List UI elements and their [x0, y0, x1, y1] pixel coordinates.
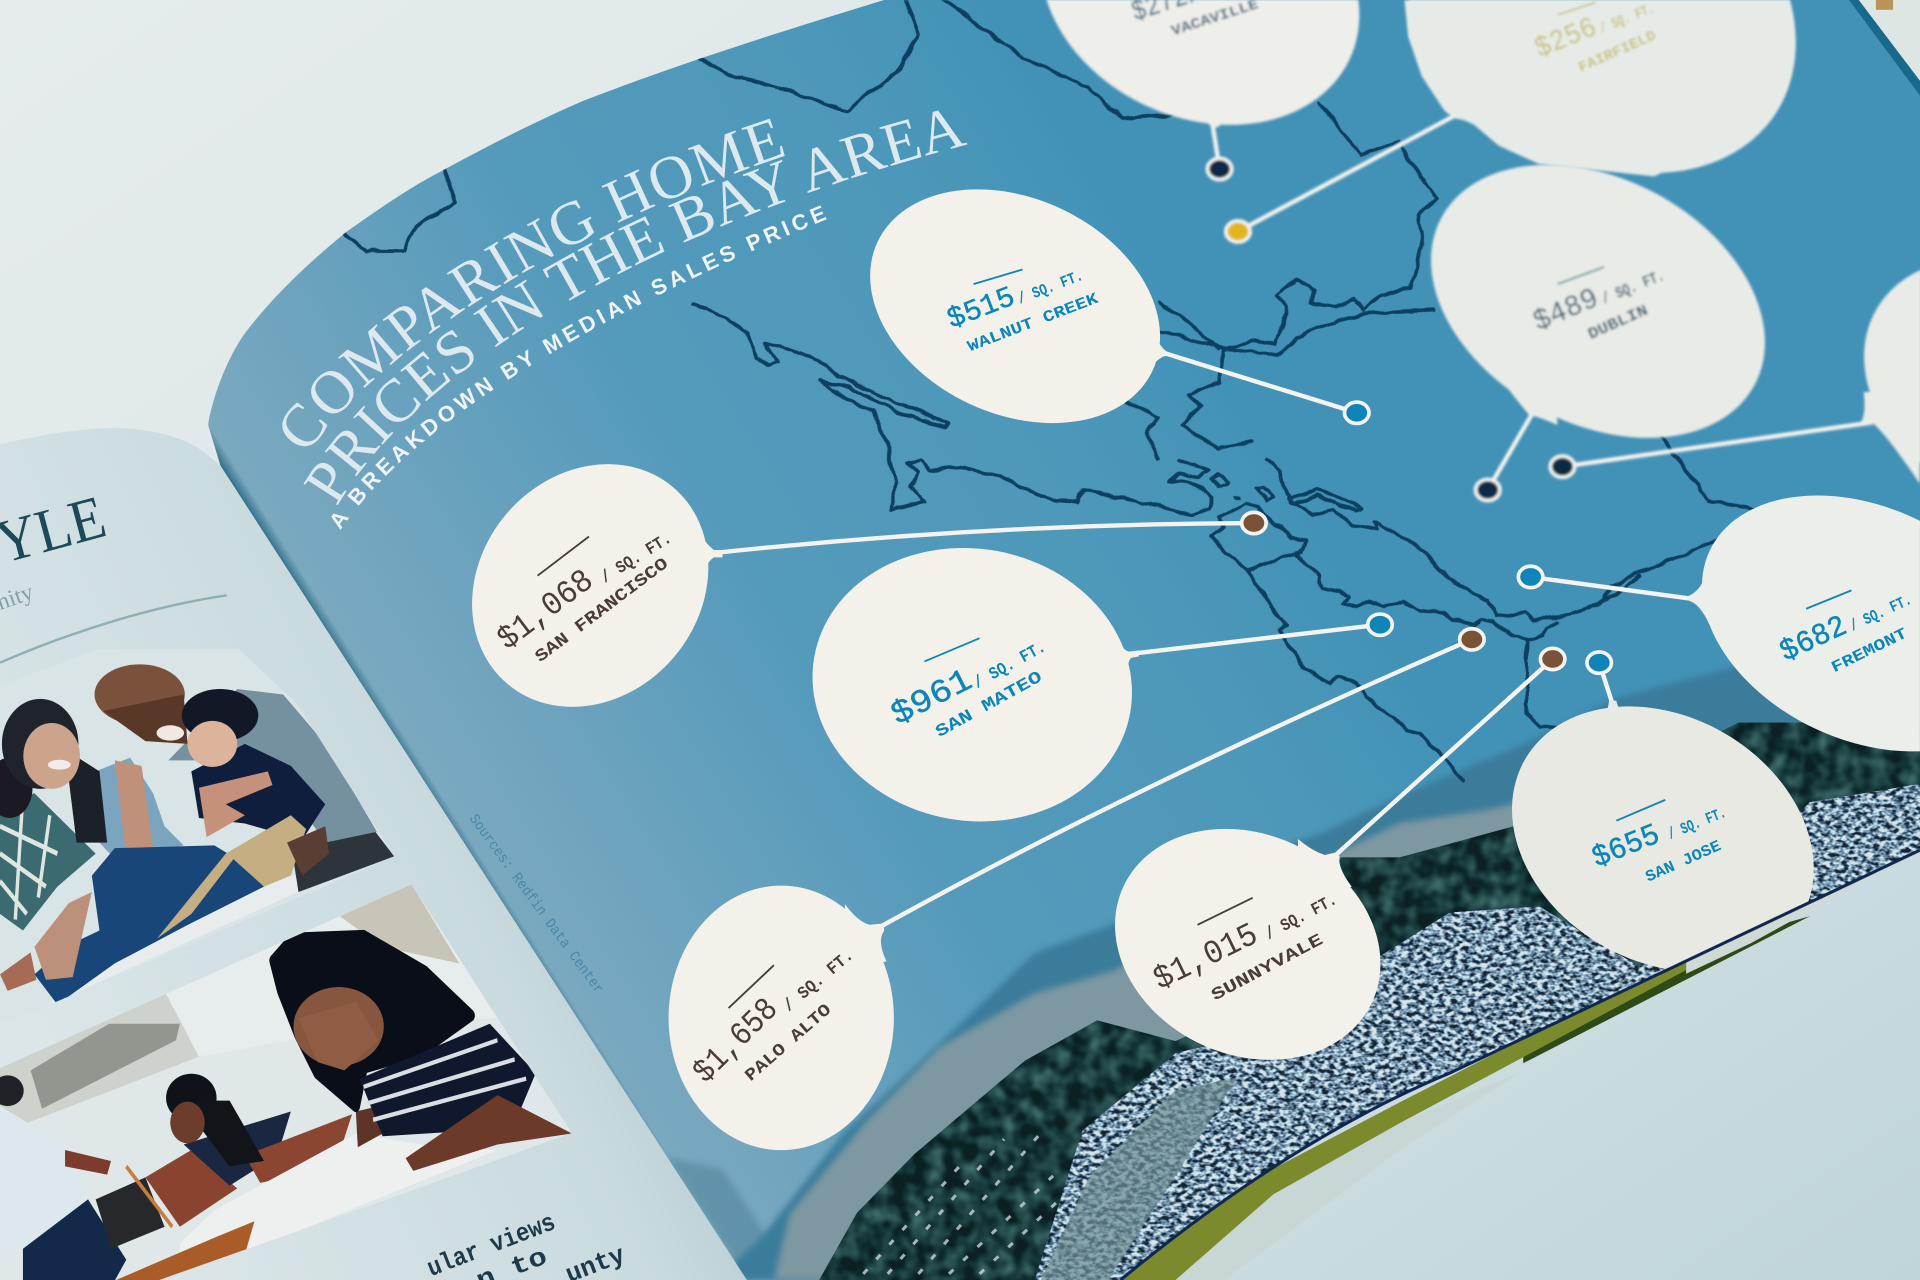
- callout: Fairfield: FAIRFIELD: [1576, 28, 1659, 77]
- callout: Sunnyvale: / SQ. FT.: [1262, 891, 1341, 945]
- callout: San Mateo: $961: [885, 661, 978, 734]
- under-page stack: [1102, 850, 1920, 1280]
- callout: Walnut Creek: [832, 144, 1369, 468]
- callout: San Mateo: [812, 548, 1394, 822]
- callout: Fremont: FREMONT: [1829, 625, 1911, 677]
- callout: Walnut Creek: $515: [943, 281, 1020, 337]
- callout: Fairfield: $256: [1530, 11, 1602, 66]
- callout: San Francisco: [423, 416, 1266, 755]
- callout: Palo Alto: / SQ. FT.: [780, 947, 858, 1016]
- callout: Fairfield: [1226, 0, 1865, 247]
- aerial photo of marina: [734, 666, 1920, 1280]
- photo: girls drawing in the kitchen: [0, 882, 576, 1280]
- body copy fragment: [423, 1208, 629, 1280]
- callout: San Jose: SAN JOSE: [1643, 837, 1724, 886]
- callout: Dublin: [1384, 110, 1812, 501]
- callout: Dublin: / SQ. FT.: [1599, 267, 1667, 308]
- top-right page edge: [1837, 0, 1920, 110]
- callout: Walnut Creek: / SQ. FT.: [1015, 267, 1086, 308]
- callout: San Mateo: SAN MATEO: [933, 668, 1046, 743]
- subtitle: A BREAKDOWN BY MEDIAN SALES PRICE: [331, 205, 827, 530]
- callout: Vacaville: [996, 0, 1404, 180]
- callout: Sunnyvale: $1,015: [1147, 916, 1264, 999]
- callout: Sunnyvale: [1077, 648, 1565, 1102]
- callout: San Jose: $655: [1588, 819, 1665, 876]
- callout: Dublin: $489: [1529, 282, 1603, 339]
- callout: Palo Alto: $1,658: [686, 991, 786, 1091]
- callout: San Mateo: / SQ. FT.: [971, 638, 1050, 694]
- callout: Fremont: [1518, 446, 1920, 801]
- callout: San Jose: / SQ. FT.: [1665, 804, 1729, 844]
- callout: Sunnyvale: SUNNYVALE: [1209, 931, 1327, 1006]
- title: COMPARING HOME: [282, 118, 785, 470]
- photo: family on sofa: [0, 650, 394, 1004]
- callout: San Francisco: SAN FRANCISCO: [532, 555, 673, 667]
- callout: Fremont: $682: [1775, 610, 1853, 670]
- left magazine page: [0, 428, 747, 1280]
- callout: San Francisco: / SQ. FT.: [598, 530, 676, 588]
- callout: Walnut Creek: WALNUT CREEK: [965, 290, 1101, 356]
- source note: Sources: Redfin Data Center: [465, 812, 606, 998]
- callout: Palo Alto: PALO ALTO: [742, 1001, 836, 1086]
- title: PRICES IN THE BAY AREA: [304, 110, 968, 506]
- callout: far-right unnamed bubble: [1550, 212, 1920, 548]
- callout: San Francisco: $1,068: [490, 562, 601, 658]
- county and bay map outlines: [343, 0, 1757, 780]
- callout: Dublin: DUBLIN: [1585, 302, 1651, 344]
- callout: Palo Alto: [669, 629, 1484, 1150]
- callout: San Jose: [1464, 652, 1862, 1025]
- page bottom edge: [1120, 850, 1920, 1280]
- callout: Vacaville: VACAVILLE: [1170, 0, 1261, 40]
